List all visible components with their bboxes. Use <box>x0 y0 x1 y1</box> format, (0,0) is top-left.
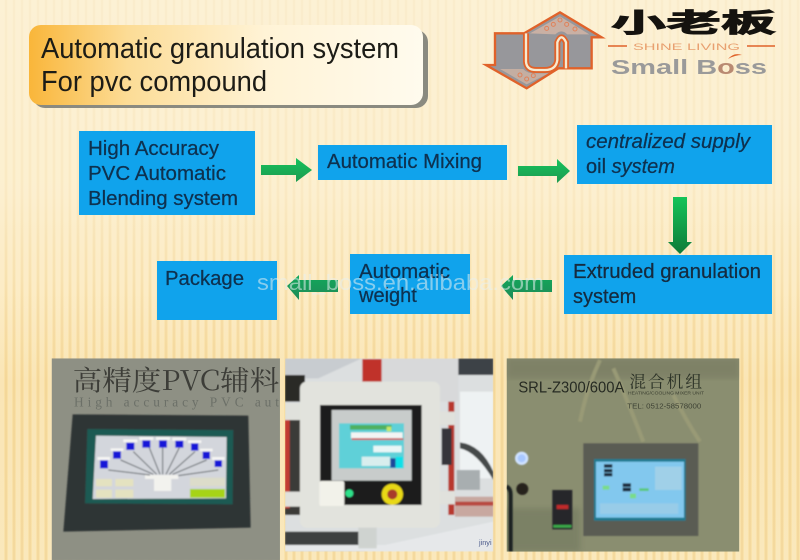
arrow: mixing to oil system <box>518 159 570 183</box>
arrow: oil system to extrusion <box>668 197 692 254</box>
flow box: extruded granulation: Extruded granulation <box>573 261 761 283</box>
title panel <box>29 25 428 108</box>
logo english name: Small B o ss <box>611 57 767 79</box>
flow box: extruded granulation <box>564 255 772 314</box>
flow box: package: Package <box>165 268 244 290</box>
machine label: 混合机组 <box>629 368 702 392</box>
photo: control cabinet with emergency stop <box>285 358 493 552</box>
machine label <box>519 373 704 408</box>
arrow: weight to package <box>287 275 338 300</box>
flow box: automatic weight: Automatic <box>359 261 450 283</box>
machine label: TEL: 0512-58578000 <box>627 401 701 410</box>
flow box: extruded granulation: system <box>573 286 636 308</box>
flow box: automatic mixing <box>318 145 507 180</box>
flow box: centralized supply oil system: oil <box>586 156 612 178</box>
photo corner brand: jinyi <box>478 538 492 547</box>
photo: blending touch panel <box>52 358 280 560</box>
flow box: package <box>157 261 277 320</box>
machine label: SRL-Z300/600A <box>518 379 625 396</box>
machine label: HEATING/COOLING MIXER UNIT <box>628 391 704 397</box>
flow box: high accuracy blending: Blending system <box>88 188 238 210</box>
flow box: high accuracy blending: High Accuracy <box>88 138 219 160</box>
icon: house arrows <box>486 12 602 88</box>
logo chinese name: 小老板 <box>611 3 776 40</box>
title text: For pvc compound <box>41 66 267 98</box>
flow box: centralized supply oil system: centralized supply <box>586 131 751 153</box>
flow box: centralized supply oil system <box>577 125 772 184</box>
arrow: extrusion to weight <box>501 275 552 300</box>
watermark: small_boss.en.alibaba.com <box>257 270 544 295</box>
logo <box>486 3 776 88</box>
flow box: automatic weight: weight <box>358 285 417 307</box>
flow box: automatic mixing: Automatic Mixing <box>327 151 482 173</box>
panel label text: 高精度PVC辅料 <box>73 359 279 398</box>
panel label text: High accuracy PVC aut <box>74 395 279 410</box>
title text: Automatic granulation system <box>41 33 399 65</box>
panel label text <box>74 366 279 410</box>
flow box: automatic weight <box>350 254 470 314</box>
touch screen device <box>63 414 251 532</box>
flow box: high accuracy blending: PVC Automatic <box>88 163 226 185</box>
arrow: blending to mixing <box>261 158 312 182</box>
photo: mixer control panel <box>507 358 739 552</box>
logo tagline: SHINE LIVING <box>633 42 740 52</box>
flow box: centralized supply oil system: system <box>612 156 675 178</box>
flow box: high accuracy blending <box>79 131 255 215</box>
